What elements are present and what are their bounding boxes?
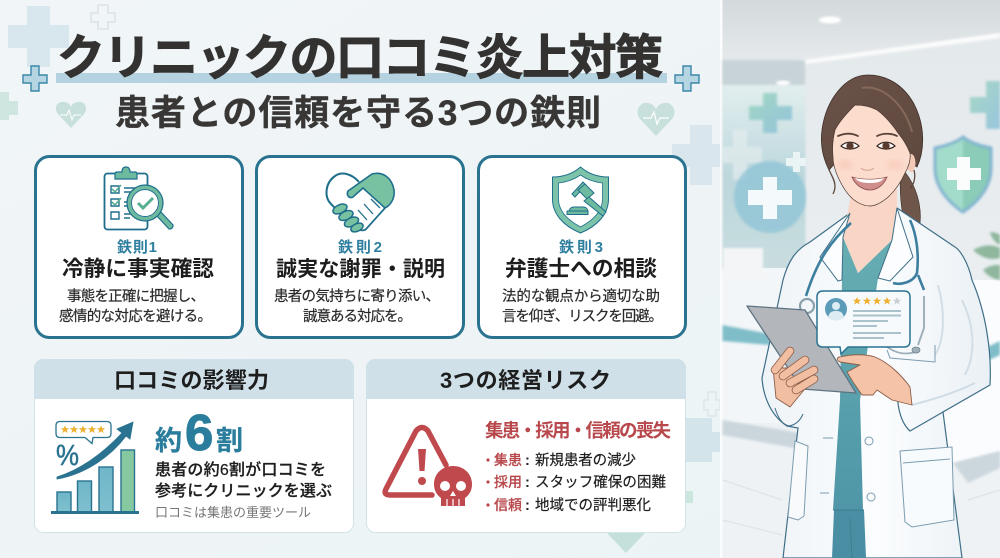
heading: loss of patients, hiring, trust: 集患・採用・信頼の喪失 [485, 420, 671, 441]
list: risk 3 [486, 497, 652, 514]
panel: rule 1 [36, 156, 242, 338]
list: risk 3: 地域での評判悪化 [535, 497, 652, 514]
text: rule 3 description [502, 288, 663, 325]
text: rule 2 description [274, 288, 440, 325]
side hair strands [826, 160, 915, 194]
right hand [837, 355, 912, 405]
text: influence description: 参考にクリニックを選ぶ [155, 482, 332, 500]
nose [861, 168, 874, 170]
coat [762, 208, 990, 558]
list: risk 2: スタッフ確保の困難 [535, 474, 666, 491]
floor [722, 430, 1000, 558]
text: rule 1 description: 事態を正確に把握し、 [67, 288, 205, 305]
label: rule 3: 鉄則3 [559, 238, 603, 256]
list: risk 1: 集患 [494, 452, 522, 468]
eyebrows [838, 134, 897, 136]
neck [843, 180, 897, 273]
eyes [841, 142, 895, 150]
reception counter left [722, 268, 812, 423]
panel: word-of-mouth influence [34, 359, 354, 532]
face [833, 105, 910, 206]
icon: warning triangle with skull [385, 428, 472, 507]
subtitle: 患者との信頼を守る3つの鉄則 [115, 94, 601, 133]
callout: review bubble [817, 291, 910, 354]
panel: rule 3 [478, 156, 686, 338]
label: rule 2: 鉄則2 [338, 238, 382, 256]
text: influence description: 患者の約6割が口コミを [155, 460, 326, 479]
text: rule 2 description: 患者の気持ちに寄り添い、 [274, 288, 440, 305]
text: rule 1 description [59, 288, 212, 325]
panel: rule 2 [256, 156, 464, 338]
coat folds and cuffs [775, 285, 975, 431]
stat: about 60 percent [155, 404, 243, 461]
smile [852, 177, 887, 190]
stat: about 60 percent: 6 [185, 404, 213, 461]
pockets and buttons [788, 345, 954, 527]
text: influence description [155, 460, 332, 500]
coat collar [820, 208, 913, 281]
list: risk 3: 信頼 [494, 497, 522, 513]
chart icon: rising bars with rating [51, 422, 139, 514]
icon: shield with gavel [552, 167, 608, 233]
illustration: doctor [747, 75, 990, 558]
title underline [56, 73, 667, 83]
icon: star rating [853, 297, 901, 305]
text: rule 3 description: 言を仰ぎ、リスクを回避。 [502, 308, 663, 325]
left hand [773, 368, 804, 407]
list: risk 1: : [525, 453, 530, 469]
decorative medical crosses and hearts [0, 5, 722, 553]
title: クリニックの口コミ炎上対策 [57, 32, 663, 85]
stat: about 60 percent: 割 [216, 426, 243, 456]
note: influence: 口コミは集患の重要ツール [155, 505, 311, 520]
stethoscope [800, 220, 924, 354]
cheeks [837, 160, 903, 170]
list: risk 1 [486, 452, 636, 469]
stat: about 60 percent: 約 [155, 426, 182, 456]
chart icon: rising bars with rating: % [56, 440, 79, 472]
panel header [366, 359, 686, 399]
tablet [747, 306, 856, 393]
icon: avatar [825, 298, 847, 320]
heading: risks: 3つの経営リスク [440, 368, 611, 393]
back hair [821, 75, 923, 170]
list: risk 2 [486, 474, 666, 491]
ponytail [900, 172, 920, 236]
scrubs [832, 237, 892, 558]
list: risk 3: : [525, 498, 530, 514]
panel header [34, 359, 354, 399]
list: risk 2: : [525, 475, 530, 491]
text: rule 2 description: 誠意ある対応を。 [303, 308, 412, 325]
heading: rule 2: 誠実な謝罪・説明 [276, 258, 445, 281]
text: rule 3 description: 法的な観点から適切な助 [502, 288, 660, 305]
panel: three business risks [366, 359, 686, 532]
text: rule 1 description: 感情的な対応を避ける。 [59, 308, 212, 325]
label: rule 1: 鉄則1 [117, 238, 157, 256]
list: risk 2: 採用 [494, 474, 522, 490]
icon: clipboard with magnifier [104, 167, 173, 230]
reception counter right [935, 280, 1000, 463]
heading: rule 1: 冷静に事実確認 [62, 256, 214, 281]
icons: blurred wall crosses and shield [722, 81, 1000, 280]
ear [906, 154, 916, 172]
illustration: clinic background [720, 0, 1000, 558]
left hand fingers [775, 351, 814, 390]
heading: rule 3: 弁護士への相談 [505, 256, 657, 281]
heading: influence: 口コミの影響力 [114, 368, 269, 393]
list: risk 1: 新規患者の減少 [535, 452, 636, 469]
icon: handshake [326, 173, 394, 234]
